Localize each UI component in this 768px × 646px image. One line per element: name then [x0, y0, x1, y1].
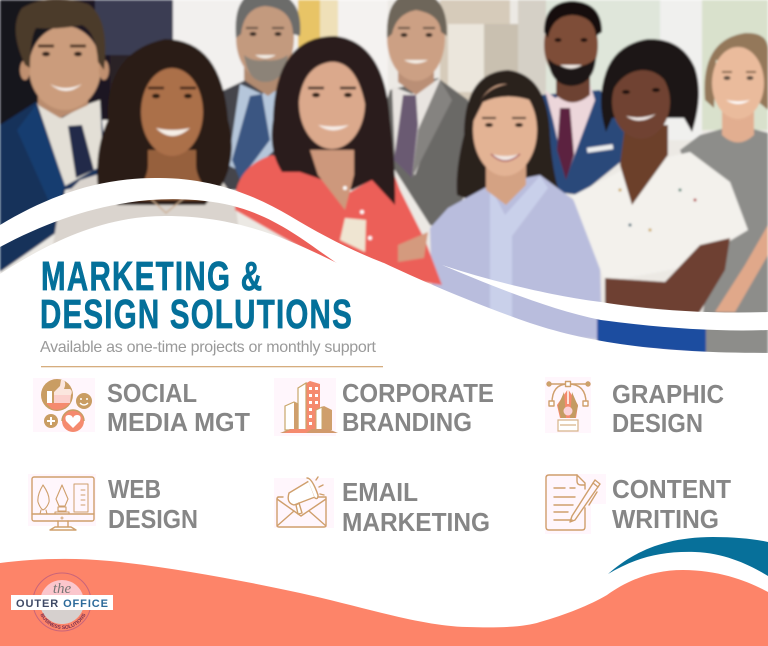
icon: envelope with megaphone: [274, 477, 334, 528]
title: [40, 253, 352, 337]
logo: The Outer Office Business Solutions: [11, 572, 113, 632]
coral footer wave: [0, 559, 768, 646]
photo background: office: [0, 0, 768, 360]
logo tagline: BUSINESS SOLUTIONS: [40, 613, 86, 629]
label: MARKETING: [342, 507, 490, 537]
person 9: woman in grey dress: [680, 33, 768, 354]
icon: monitor with design tools: [28, 474, 96, 530]
logo wordmark: OUTER OFFICE: [16, 598, 108, 610]
divider rule: [41, 366, 383, 367]
service: content writing: [545, 474, 731, 534]
service: web design: [28, 474, 198, 534]
person 8: woman with curly hair in white shirt: [572, 39, 748, 354]
person 3: man with grey hair in dark suit: [220, 0, 345, 190]
service: corporate branding: [274, 378, 494, 437]
icon: document with pencil: [545, 474, 606, 534]
person 6: woman in lavender shirt: [430, 70, 602, 340]
subtitle: Available as one-time projects or monthly support: [40, 339, 377, 356]
person 7: man in navy suit: [540, 1, 633, 195]
icon: pen tool with bezier handles: [545, 377, 591, 433]
person 1: man in navy blazer: [0, 0, 109, 272]
teal swoosh: [608, 537, 768, 576]
label: DESIGN: [612, 408, 703, 438]
label: EMAIL: [342, 477, 418, 507]
logo script word: the: [53, 581, 72, 597]
service: graphic design: [545, 377, 724, 438]
title: MARKETING &: [41, 253, 262, 299]
service: social media management: [33, 378, 250, 437]
label: WEB: [108, 474, 161, 504]
photo: team of nine business people: [0, 0, 768, 360]
person 4: woman in coral cardigan: [235, 36, 442, 285]
label: DESIGN: [108, 504, 198, 534]
label: CONTENT: [612, 474, 731, 504]
label: BRANDING: [342, 407, 472, 437]
lower-right swoosh: [442, 265, 768, 331]
label: CORPORATE: [342, 378, 494, 408]
person 2: woman in white blouse: [53, 39, 240, 245]
white wave: upper swoosh band and main white panel: [0, 178, 768, 646]
label: MEDIA MGT: [107, 407, 250, 437]
label: WRITING: [612, 504, 719, 534]
label: SOCIAL: [107, 378, 197, 408]
label: GRAPHIC: [612, 379, 724, 409]
icon: office towers: [274, 378, 338, 436]
service: email marketing: [274, 477, 490, 537]
title: DESIGN SOLUTIONS: [40, 291, 352, 337]
person 5: man in grey suit: [378, 0, 470, 228]
icon: social media bubbles: [33, 378, 95, 432]
